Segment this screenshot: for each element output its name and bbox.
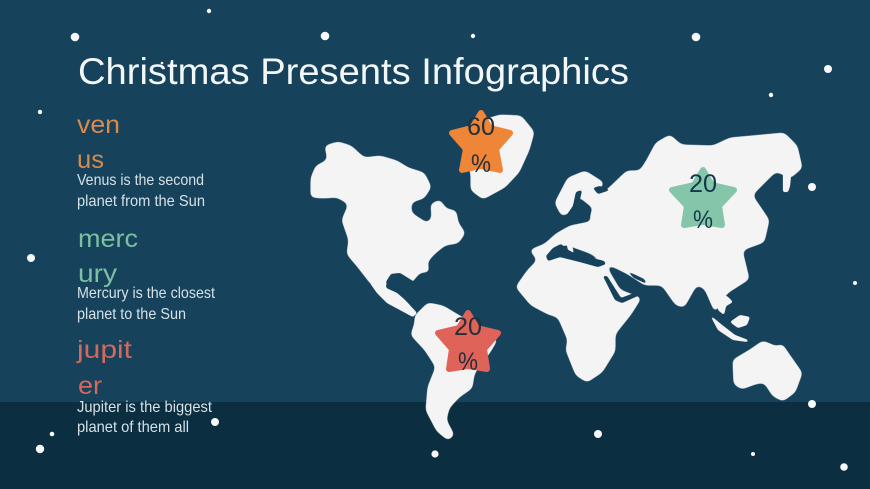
star: 20% red: 20 — [454, 313, 482, 341]
title: Christmas Presents Infographics — [78, 51, 629, 92]
legend: mercury — [77, 225, 215, 323]
star: 20% red: % — [458, 348, 478, 376]
legend: mercury: merc — [78, 225, 138, 253]
legend: mercury: planet to the Sun — [77, 306, 186, 323]
legend: mercury: ury — [78, 260, 118, 288]
legend: venus — [77, 111, 205, 210]
star: 60% orange — [452, 113, 510, 178]
star: 60% orange: % — [471, 150, 491, 178]
star: 20% green: % — [693, 206, 713, 234]
legend: jupiter: planet of them all — [77, 419, 189, 436]
star: 60% orange: 60 — [467, 113, 495, 141]
fine landmasses — [370, 172, 791, 342]
legend: jupiter — [76, 336, 213, 436]
legend: mercury: Mercury is the closest — [77, 285, 215, 302]
legend: venus: Venus is the second — [77, 172, 204, 189]
legend: venus: planet from the Sun — [77, 193, 205, 210]
star: 20% red — [438, 313, 498, 376]
main landmasses — [311, 115, 802, 440]
star: 20% green — [672, 170, 734, 234]
legend: jupiter: er — [78, 372, 102, 400]
ground band — [0, 402, 870, 489]
legend: jupiter: jupit — [76, 336, 132, 364]
legend: venus: us — [77, 146, 104, 174]
legend: jupiter: Jupiter is the biggest — [77, 399, 213, 416]
star: 20% green: 20 — [689, 170, 717, 198]
inland seas — [386, 186, 647, 311]
legend: venus: ven — [77, 111, 120, 139]
world map — [311, 115, 802, 440]
